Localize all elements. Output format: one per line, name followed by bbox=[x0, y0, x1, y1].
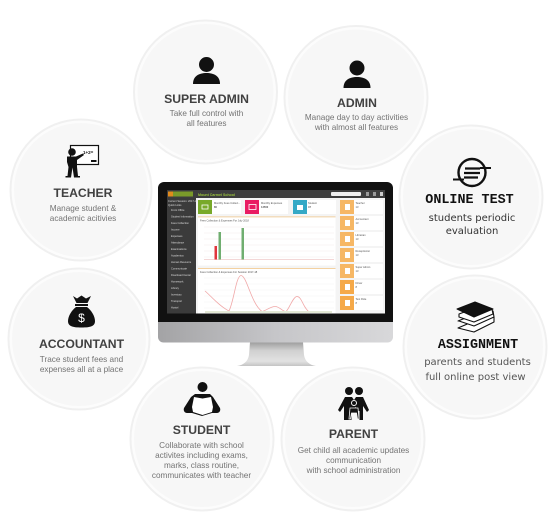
panel: online test bbox=[400, 126, 542, 268]
heading: super admin: SUPER ADMIN bbox=[164, 92, 249, 106]
stat cards: Monthly Expenses bbox=[261, 201, 283, 205]
dashboard screen bbox=[167, 190, 385, 314]
stat cards: Student bbox=[308, 201, 317, 205]
text: parent description: communication bbox=[326, 456, 381, 465]
text: teacher description: academic acitivies bbox=[50, 214, 116, 223]
text: assignment description: parents and students bbox=[424, 357, 531, 368]
text: teacher description: Manage student & bbox=[50, 204, 117, 213]
icon: student reading bbox=[184, 382, 220, 416]
right staff cards: Test Role bbox=[356, 297, 367, 301]
monitor chin bbox=[158, 322, 393, 342]
panel: super admin bbox=[134, 20, 277, 164]
heading: teacher: TEACHER bbox=[54, 186, 113, 200]
text: student description: communicates with teacher bbox=[152, 471, 251, 480]
stat cards: 47 bbox=[308, 205, 311, 209]
icon: super admin person bbox=[193, 57, 220, 84]
panel: admin bbox=[284, 26, 428, 169]
icon: stack of books bbox=[457, 302, 494, 332]
dashboard sidebar: Hostel bbox=[171, 306, 179, 310]
dashboard sidebar: Inventory bbox=[171, 292, 182, 296]
right staff cards: 13 bbox=[356, 205, 359, 209]
right staff cards: Super Admin bbox=[356, 265, 371, 269]
icon: teacher at board: 1+2= bbox=[83, 150, 94, 155]
dashboard sidebar: Fees Collection bbox=[171, 221, 189, 225]
dashboard sidebar: Homework bbox=[171, 280, 184, 284]
line chart bbox=[198, 268, 336, 314]
panel: student bbox=[130, 368, 274, 510]
dashboard sidebar: Quick Links bbox=[168, 203, 182, 207]
icon: money bag: $ bbox=[78, 311, 85, 325]
dashboard top bar bbox=[167, 190, 385, 198]
heading: admin: ADMIN bbox=[337, 96, 377, 110]
icon: teacher at board bbox=[66, 146, 98, 178]
dashboard sidebar: Transport bbox=[171, 299, 182, 303]
icon: online test bbox=[453, 159, 491, 186]
panel: accountant bbox=[8, 268, 150, 410]
stat cards: 13500 bbox=[261, 205, 269, 209]
panel: teacher bbox=[10, 120, 152, 260]
dashboard sidebar: Income bbox=[171, 228, 180, 232]
text: student description: activites including exams, bbox=[155, 451, 248, 460]
right staff cards bbox=[340, 200, 383, 310]
text: super admin description: all features bbox=[186, 119, 227, 128]
right staff cards: Librarian bbox=[356, 233, 366, 237]
text: super admin description: Take full control with bbox=[170, 109, 244, 118]
icon: money bag bbox=[68, 296, 95, 328]
stat cards bbox=[198, 200, 336, 214]
right staff cards: 13 bbox=[356, 237, 359, 241]
dashboard sidebar bbox=[167, 198, 198, 314]
dashboard sidebar: Library bbox=[171, 286, 180, 290]
dashboard sidebar: Student Information bbox=[171, 214, 194, 218]
text: parent description: Get child all academic updates bbox=[298, 446, 409, 455]
monitor stand bbox=[237, 342, 316, 366]
icon: parent family bbox=[338, 387, 369, 420]
bar chart: Fees Collection & Expenses For July 2018 bbox=[200, 218, 249, 222]
text: student description: Collaborate with school bbox=[159, 441, 244, 450]
heading: student: STUDENT bbox=[173, 423, 231, 437]
illustration: desktop monitor with dashboard bbox=[158, 182, 393, 366]
right staff cards: Teacher bbox=[356, 201, 365, 205]
dashboard sidebar: Front Office bbox=[171, 208, 185, 212]
stat cards: Monthly Fees Collect... bbox=[214, 201, 241, 205]
dashboard sidebar: Communicate bbox=[171, 266, 188, 270]
right staff cards: Driver bbox=[356, 281, 363, 285]
panel: assignment bbox=[404, 276, 546, 418]
text: online test description: evaluation bbox=[446, 226, 498, 237]
dashboard sidebar: Current Session: 2017-18 bbox=[168, 199, 198, 203]
right staff cards: 8 bbox=[356, 301, 358, 305]
dashboard sidebar: Attendance bbox=[171, 240, 185, 244]
text: admin description: with almost all features bbox=[314, 123, 398, 132]
right staff cards: Receptionist bbox=[356, 249, 370, 253]
right staff cards: 13 bbox=[356, 269, 359, 273]
heading: online test: ONLINE TEST bbox=[425, 193, 514, 208]
monitor bezel bbox=[158, 182, 393, 322]
text: online test description: students periodic bbox=[429, 213, 515, 224]
dashboard sidebar: Download Center bbox=[171, 273, 191, 277]
text: assignment description: full online post view bbox=[425, 372, 526, 383]
right staff cards: 13 bbox=[356, 221, 359, 225]
line chart: Fees Collection & Expenses For Session 2017-18 bbox=[200, 270, 258, 274]
right staff cards: Accountant bbox=[356, 217, 369, 221]
stat cards: 80 bbox=[214, 205, 217, 209]
icon: admin person bbox=[344, 60, 370, 88]
dashboard sidebar: Academics bbox=[171, 254, 184, 258]
text: parent description: with school administration bbox=[306, 466, 401, 475]
panel: parent bbox=[282, 368, 424, 510]
text: student description: marks, class routine, bbox=[164, 461, 239, 470]
text: accountant description: expenses all at a place bbox=[40, 365, 124, 374]
dashboard sidebar: Expenses bbox=[171, 234, 183, 238]
dashboard sidebar: Human Resource bbox=[171, 260, 192, 264]
bar chart bbox=[198, 216, 336, 266]
right staff cards: 13 bbox=[356, 253, 359, 257]
dashboard screen: Mount Carmel School bbox=[198, 193, 235, 197]
heading: assignment: ASSIGNMENT bbox=[438, 338, 518, 353]
heading: parent: PARENT bbox=[329, 427, 379, 441]
heading: accountant: ACCOUNTANT bbox=[39, 337, 125, 351]
text: admin description: Manage day to day activities bbox=[305, 113, 408, 122]
right staff cards: 8 bbox=[356, 285, 358, 289]
dashboard sidebar: Examinations bbox=[171, 247, 187, 251]
text: accountant description: Trace student fees and bbox=[40, 355, 124, 364]
